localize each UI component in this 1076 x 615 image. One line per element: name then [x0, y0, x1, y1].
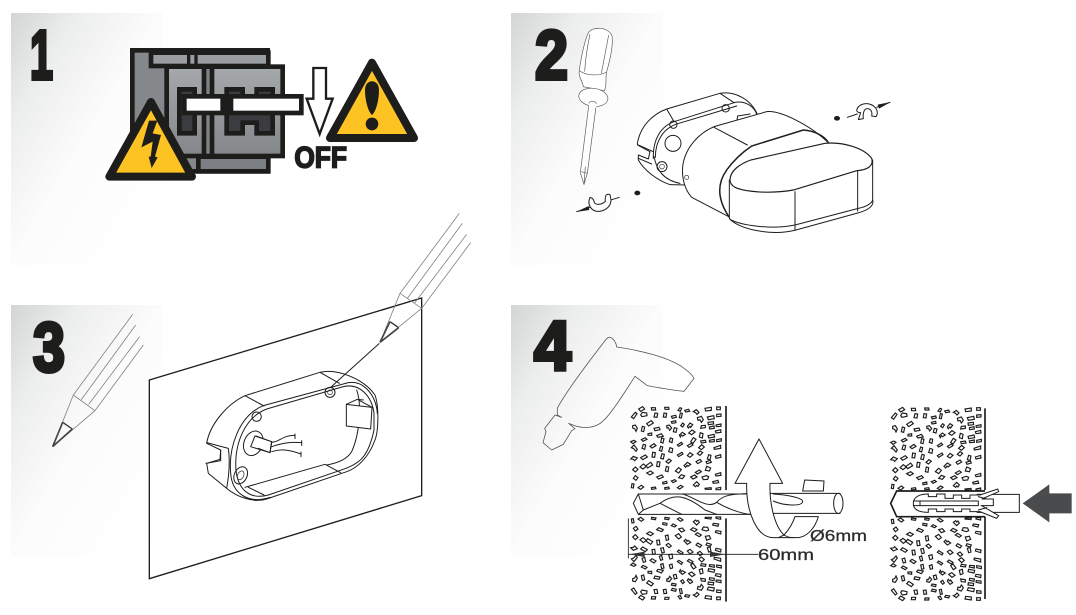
aggregate texture upper	[891, 407, 981, 490]
icon: pencil over wall sheet	[380, 213, 471, 342]
sensor mounting base	[637, 93, 758, 185]
heading: step number 4: 4	[534, 307, 571, 385]
illustration: circuit breaker switched off with warnings	[109, 50, 414, 177]
icon: electric hazard triangle	[109, 102, 192, 177]
plug	[913, 489, 1019, 518]
arrow: insert direction	[1023, 484, 1072, 522]
sensor front cap	[729, 143, 873, 232]
breaker housing	[132, 50, 301, 171]
marking line from pencil to screw hole	[331, 343, 379, 387]
illustration: wall plug inserted	[891, 407, 1072, 601]
panel: step 4 background	[511, 305, 663, 557]
arrow: unscrew right	[847, 102, 891, 120]
panel: step 2 background	[511, 13, 663, 265]
illustration: concrete wall with drill bit	[628, 406, 843, 602]
paper sheet	[149, 298, 422, 579]
aggregate texture upper	[631, 407, 721, 490]
screw left	[634, 191, 640, 195]
icon: electric drill outline	[543, 337, 694, 450]
aggregate texture lower	[631, 517, 721, 600]
screwdriver	[578, 28, 612, 184]
off label: OFF	[294, 141, 347, 174]
panel: step 3 background	[11, 305, 163, 557]
aggregate texture lower	[891, 518, 981, 601]
icon: general warning triangle	[330, 63, 414, 138]
heading: step number 2: 2	[535, 16, 568, 94]
arrow: unscrew left	[576, 194, 619, 212]
illustration: screwdriver, sensor and screws	[576, 28, 891, 232]
rotation arrow fold	[778, 535, 793, 538]
heading: step number 3: 3	[33, 308, 65, 386]
arrow: drill rotation	[735, 439, 818, 538]
heading: step number 1: 1	[30, 16, 53, 94]
wall edge	[723, 406, 728, 602]
dimension line 60mm	[628, 518, 758, 558]
off arrow	[307, 68, 333, 134]
panel: step 1 background	[11, 13, 163, 265]
sensor body	[682, 112, 828, 218]
illustration: marking template on wall	[149, 298, 422, 579]
screw right	[834, 116, 840, 121]
mounting base drawing	[206, 371, 378, 500]
drill bit	[633, 480, 843, 514]
label: drill diameter: Ø6mm	[810, 528, 867, 545]
label: drill depth: 60mm	[758, 547, 814, 564]
icon: pencil left	[53, 314, 143, 447]
wall and hole outline	[891, 408, 985, 599]
